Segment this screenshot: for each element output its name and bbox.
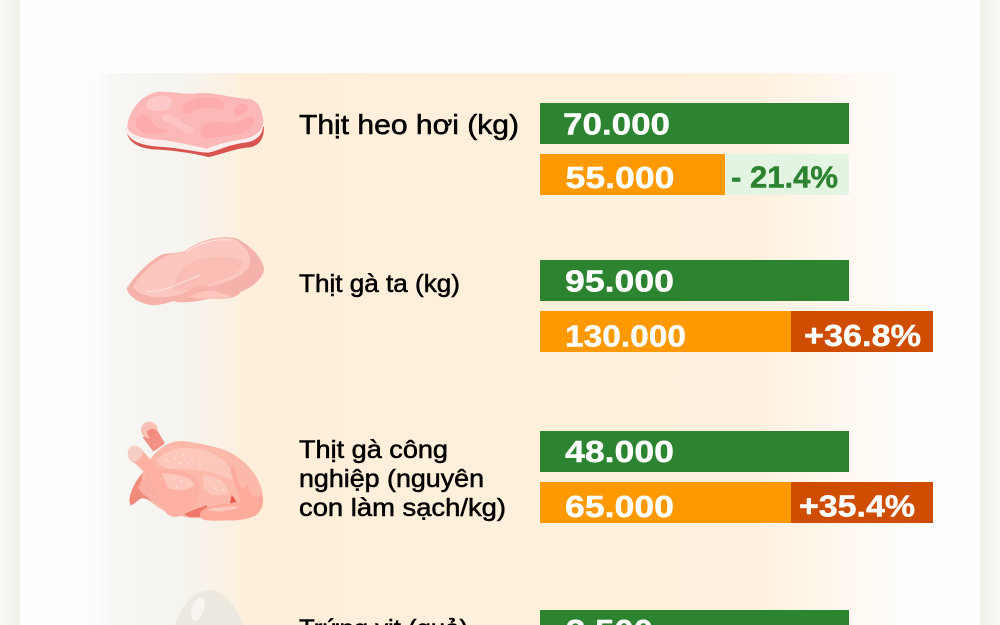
bar: current price pork (540, 154, 725, 195)
icon: duck egg (172, 590, 246, 625)
page background left edge (0, 0, 20, 625)
label: industrial chicken: con làm sạch/kg) (299, 494, 506, 522)
row: industrial chicken (128, 422, 933, 524)
label: free-range chicken: Thịt gà ta (kg) (299, 270, 460, 298)
label: industrial chicken: nghiệp (nguyên (299, 465, 484, 493)
change badge: free-range chicken (791, 311, 933, 353)
bar: previous price pork: 70.000 (563, 106, 670, 142)
bar: previous price pork (540, 103, 849, 144)
bar: current price pork: 55.000 (566, 160, 674, 195)
bar: previous price free-range chicken: 95.000 (565, 264, 674, 298)
page background right edge (980, 0, 1000, 625)
label: pork: Thịt heo hơi (kg) (299, 109, 519, 140)
change badge: industrial chicken: +35.4% (799, 488, 915, 524)
bar: previous price industrial chicken: 48.000 (565, 434, 674, 469)
bar: previous price free-range chicken (540, 260, 849, 301)
label: industrial chicken (299, 436, 506, 522)
label: industrial chicken: Thịt gà công (299, 436, 448, 464)
change badge: industrial chicken (791, 482, 933, 524)
bar: current price industrial chicken (540, 482, 791, 524)
panel: price table background (83, 73, 920, 625)
bar: previous price duck egg (540, 610, 849, 625)
row: free-range chicken (127, 237, 933, 354)
bar: current price industrial chicken: 65.000 (565, 489, 674, 524)
change badge: pork: - 21.4% (731, 160, 838, 194)
bar: current price free-range chicken: 130.000 (565, 318, 686, 354)
icon: pork slice (126, 92, 264, 157)
bar: previous price industrial chicken (540, 431, 849, 472)
change badge: free-range chicken: +36.8% (804, 318, 921, 353)
row: duck egg (172, 590, 849, 625)
bar: current price free-range chicken (540, 311, 791, 354)
icon: whole chicken (128, 422, 263, 521)
icon: chicken breast (127, 237, 264, 305)
row: pork (126, 92, 849, 195)
